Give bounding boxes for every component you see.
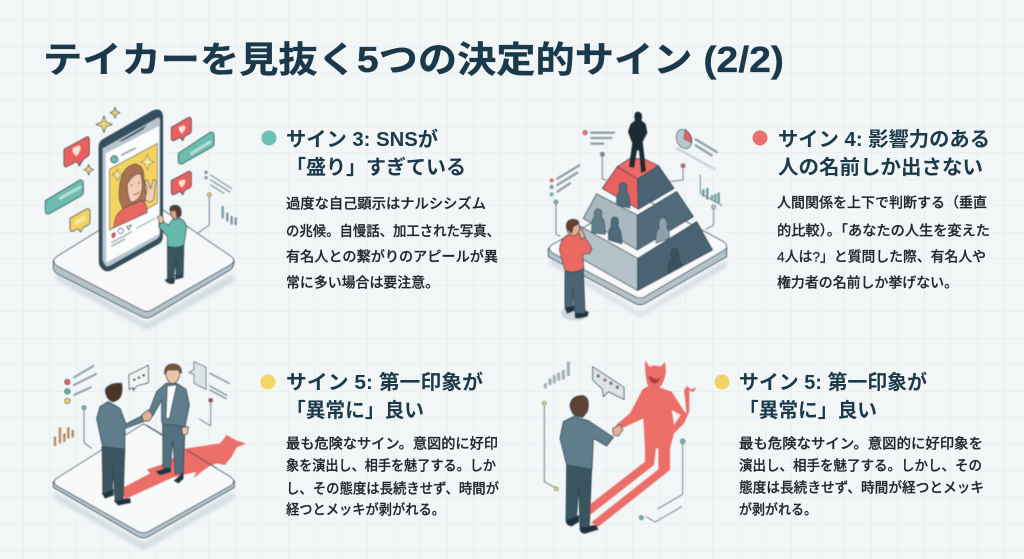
body text: sign 5 left xyxy=(286,436,499,518)
body text: sign 5 right: 演出し、相手を魅了する。しかし、その xyxy=(739,458,982,474)
heading: sign 4 xyxy=(778,128,990,179)
panel: sign 5 text, left xyxy=(260,370,499,518)
body text: sign 4: 権力者の名前しか挙げない。 xyxy=(777,274,958,292)
body text: sign 3: 有名人との繋がりのアピールが異 xyxy=(286,248,498,266)
shadow: devil on floor xyxy=(122,435,246,499)
figure: red devil shadow xyxy=(589,360,697,527)
bullet: yellow dot xyxy=(714,374,730,390)
icon: notes, bubble, chart xyxy=(55,362,229,448)
platform xyxy=(53,200,234,330)
heading: sign 5 right: サイン 5: 第一印象が xyxy=(739,370,927,394)
figure: man in teal xyxy=(157,205,187,284)
heading: sign 3: 「盛り」すぎている xyxy=(286,155,466,179)
figure: man from behind shaking hands xyxy=(97,383,143,505)
body text: sign 5 left: 最も危険なサイン。意図的に好印 xyxy=(286,436,498,452)
figure: man in red thinking xyxy=(559,219,592,321)
panel: sign 5 illustration, devil shadow xyxy=(542,360,697,533)
figure: businessman from behind xyxy=(560,396,623,533)
panel: sign 4 text xyxy=(752,128,990,292)
body text: sign 5 right xyxy=(739,436,984,518)
heading: sign 3 xyxy=(286,127,466,179)
figures: people in pyramid xyxy=(592,182,682,274)
icon: like badges xyxy=(45,117,214,232)
heading: sign 4: 人の名前しか出さない xyxy=(778,156,983,179)
heading: sign 5 right xyxy=(739,370,927,422)
body text: sign 4 xyxy=(777,196,990,292)
body text: sign 5 left: 経つとメッキが剥がれる。 xyxy=(286,502,445,518)
panel: sign 5 illustration, handshake on platform xyxy=(53,362,246,550)
heading: sign 5 left xyxy=(286,370,483,422)
icon: chart, bubble, connectors xyxy=(542,362,685,522)
body text: sign 5 right: 態度は長続きせず、時間が経つとメッキ xyxy=(739,480,984,496)
body text: sign 5 right: 最も危険なサイン。意図的に好印象を xyxy=(739,436,983,452)
figure: smiling man facing forward xyxy=(142,364,189,483)
platform xyxy=(53,424,234,550)
body text: sign 3: 常に多い場合は要注意。 xyxy=(286,274,439,292)
bullet: red dot xyxy=(752,130,768,146)
body text: sign 4: 的比較）。「あなたの人生を変えた xyxy=(777,224,990,240)
heading: sign 4: サイン 4: 影響力のある xyxy=(778,128,990,151)
body text: sign 3: 過度な自己顕示はナルシシズム xyxy=(286,196,486,212)
icon: data note and mini chart xyxy=(198,171,236,233)
body text: sign 5 left: し、その態度は長続きせず、時間が xyxy=(286,480,499,498)
panel: sign 3 illustration xyxy=(45,107,236,330)
body text: sign 4: 人間関係を上下で判断する（垂直 xyxy=(777,196,987,212)
panel: sign 5 text, right xyxy=(714,370,984,518)
bullet: teal dot xyxy=(262,130,276,146)
figure: leader silhouette on top xyxy=(628,112,647,173)
platform xyxy=(548,197,727,317)
icon: smartphone with photo post xyxy=(99,110,163,271)
heading: sign 3: サイン 3: SNSが xyxy=(286,127,438,151)
body text: sign 3 xyxy=(286,196,500,292)
body text: sign 5 right: が剥がれる。 xyxy=(739,502,817,518)
icon: notes and charts with connector lines xyxy=(550,127,722,236)
heading: sign 5 left: 「異常に」良い xyxy=(286,399,424,422)
bullet: yellow dot xyxy=(260,374,276,390)
body text: sign 5 left: 象を演出し、相手を魅了する。しか xyxy=(286,458,496,474)
body text: sign 4: 4人は?」と質問した際、有名人や xyxy=(777,248,986,266)
chart: power pyramid xyxy=(573,158,713,291)
icon: sparkles xyxy=(84,107,120,175)
body text: sign 3: の兆候。自慢話、加工された写真、 xyxy=(286,223,500,240)
heading: sign 5 right: 「異常に」良い xyxy=(739,399,877,422)
title: テイカーを見抜く5つの決定的サイン (2/2) xyxy=(43,39,784,80)
heading: sign 5 left: サイン 5: 第一印象が xyxy=(286,370,483,394)
panel: sign 3 text xyxy=(262,127,500,292)
panel: sign 4 illustration xyxy=(548,112,727,321)
